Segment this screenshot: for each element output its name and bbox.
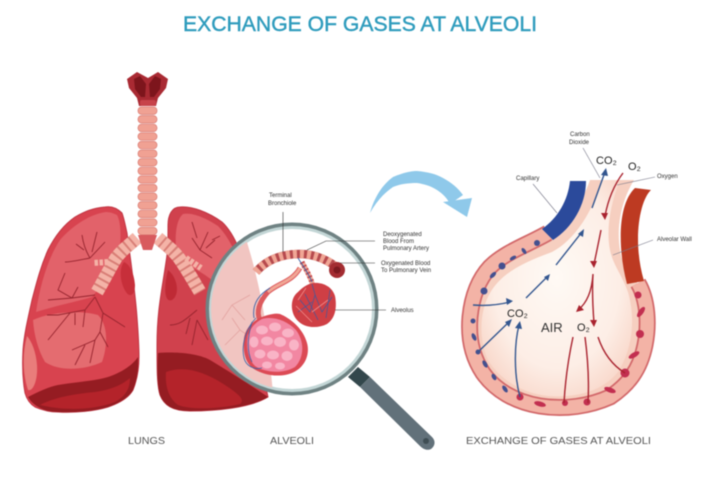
caption: exchange of gases: EXCHANGE OF GASES AT ALVEOLI (466, 436, 651, 447)
gas label: air: AIR (541, 320, 563, 335)
arrows: carbon dioxide (473, 168, 608, 397)
bronchial branches: right lung (170, 222, 220, 345)
right lung (157, 207, 268, 411)
blue capillary (542, 181, 586, 240)
label: carbon dioxide (569, 132, 600, 178)
label: deoxygenated blood (307, 232, 429, 252)
gas label: CO2 inside: CO₂ (507, 308, 528, 320)
capillary band (470, 233, 647, 408)
alveolar sac (465, 180, 649, 413)
label: carbon dioxide: Dioxide (569, 140, 590, 146)
left lung (23, 207, 139, 412)
label: alveolus (335, 308, 414, 314)
label: terminal bronchiole: Bronchiole (268, 201, 297, 207)
air space (481, 180, 632, 396)
caption: lungs: LUNGS (128, 436, 165, 447)
large alveolus (243, 314, 308, 376)
label: deoxygenated blood: Blood From (383, 239, 414, 245)
gas label: O2 top: O₂ (628, 161, 641, 173)
magnifier handle (348, 367, 435, 450)
label: oxygenated blood: To Pulmonary Vein (381, 268, 431, 274)
red capillary (621, 188, 651, 284)
panel: alveolus gas exchange (465, 132, 692, 413)
bronchial branches: left lung (47, 232, 125, 365)
blood cells: blue (470, 240, 540, 393)
title: EXCHANGE OF GASES AT ALVEOLI (183, 12, 537, 36)
icon: larynx (127, 72, 168, 106)
trachea (138, 107, 157, 235)
gas label: CO2 top: CO₂ (596, 155, 617, 167)
label: deoxygenated blood: Deoxygenated (383, 232, 422, 238)
panel: lungs (23, 207, 268, 412)
label: alveolus: Alveolus (391, 308, 414, 314)
label: deoxygenated blood: Pulmonary Artery (383, 246, 429, 252)
label: terminal bronchiole (268, 193, 297, 252)
label: carbon dioxide: Carbon (570, 132, 590, 138)
terminal bronchiole tube (256, 254, 345, 278)
label: oxygen (617, 174, 678, 185)
branches to alveoli (254, 258, 313, 320)
blood cells: red (516, 292, 646, 408)
label: oxygenated blood (340, 261, 431, 274)
caption: alveoli: ALVEOLI (270, 436, 314, 447)
label: terminal bronchiole: Terminal (269, 193, 292, 199)
bronchi (93, 235, 201, 292)
gas label: O2 inside: O₂ (577, 322, 590, 334)
label: capillary (516, 176, 557, 213)
label: capillary: Capillary (516, 176, 539, 182)
label: oxygenated blood: Oxygenated Blood (381, 261, 430, 267)
arrows: oxygen (564, 173, 625, 403)
small alveolus (292, 283, 336, 327)
label: oxygen: Oxygen (657, 174, 678, 180)
label: alveolar wall: Alveolar Wall (657, 237, 692, 243)
magnified lung tissue (210, 242, 273, 388)
magnifier lens (200, 222, 378, 396)
label: alveolar wall (613, 237, 692, 255)
curved arrow (370, 171, 472, 217)
